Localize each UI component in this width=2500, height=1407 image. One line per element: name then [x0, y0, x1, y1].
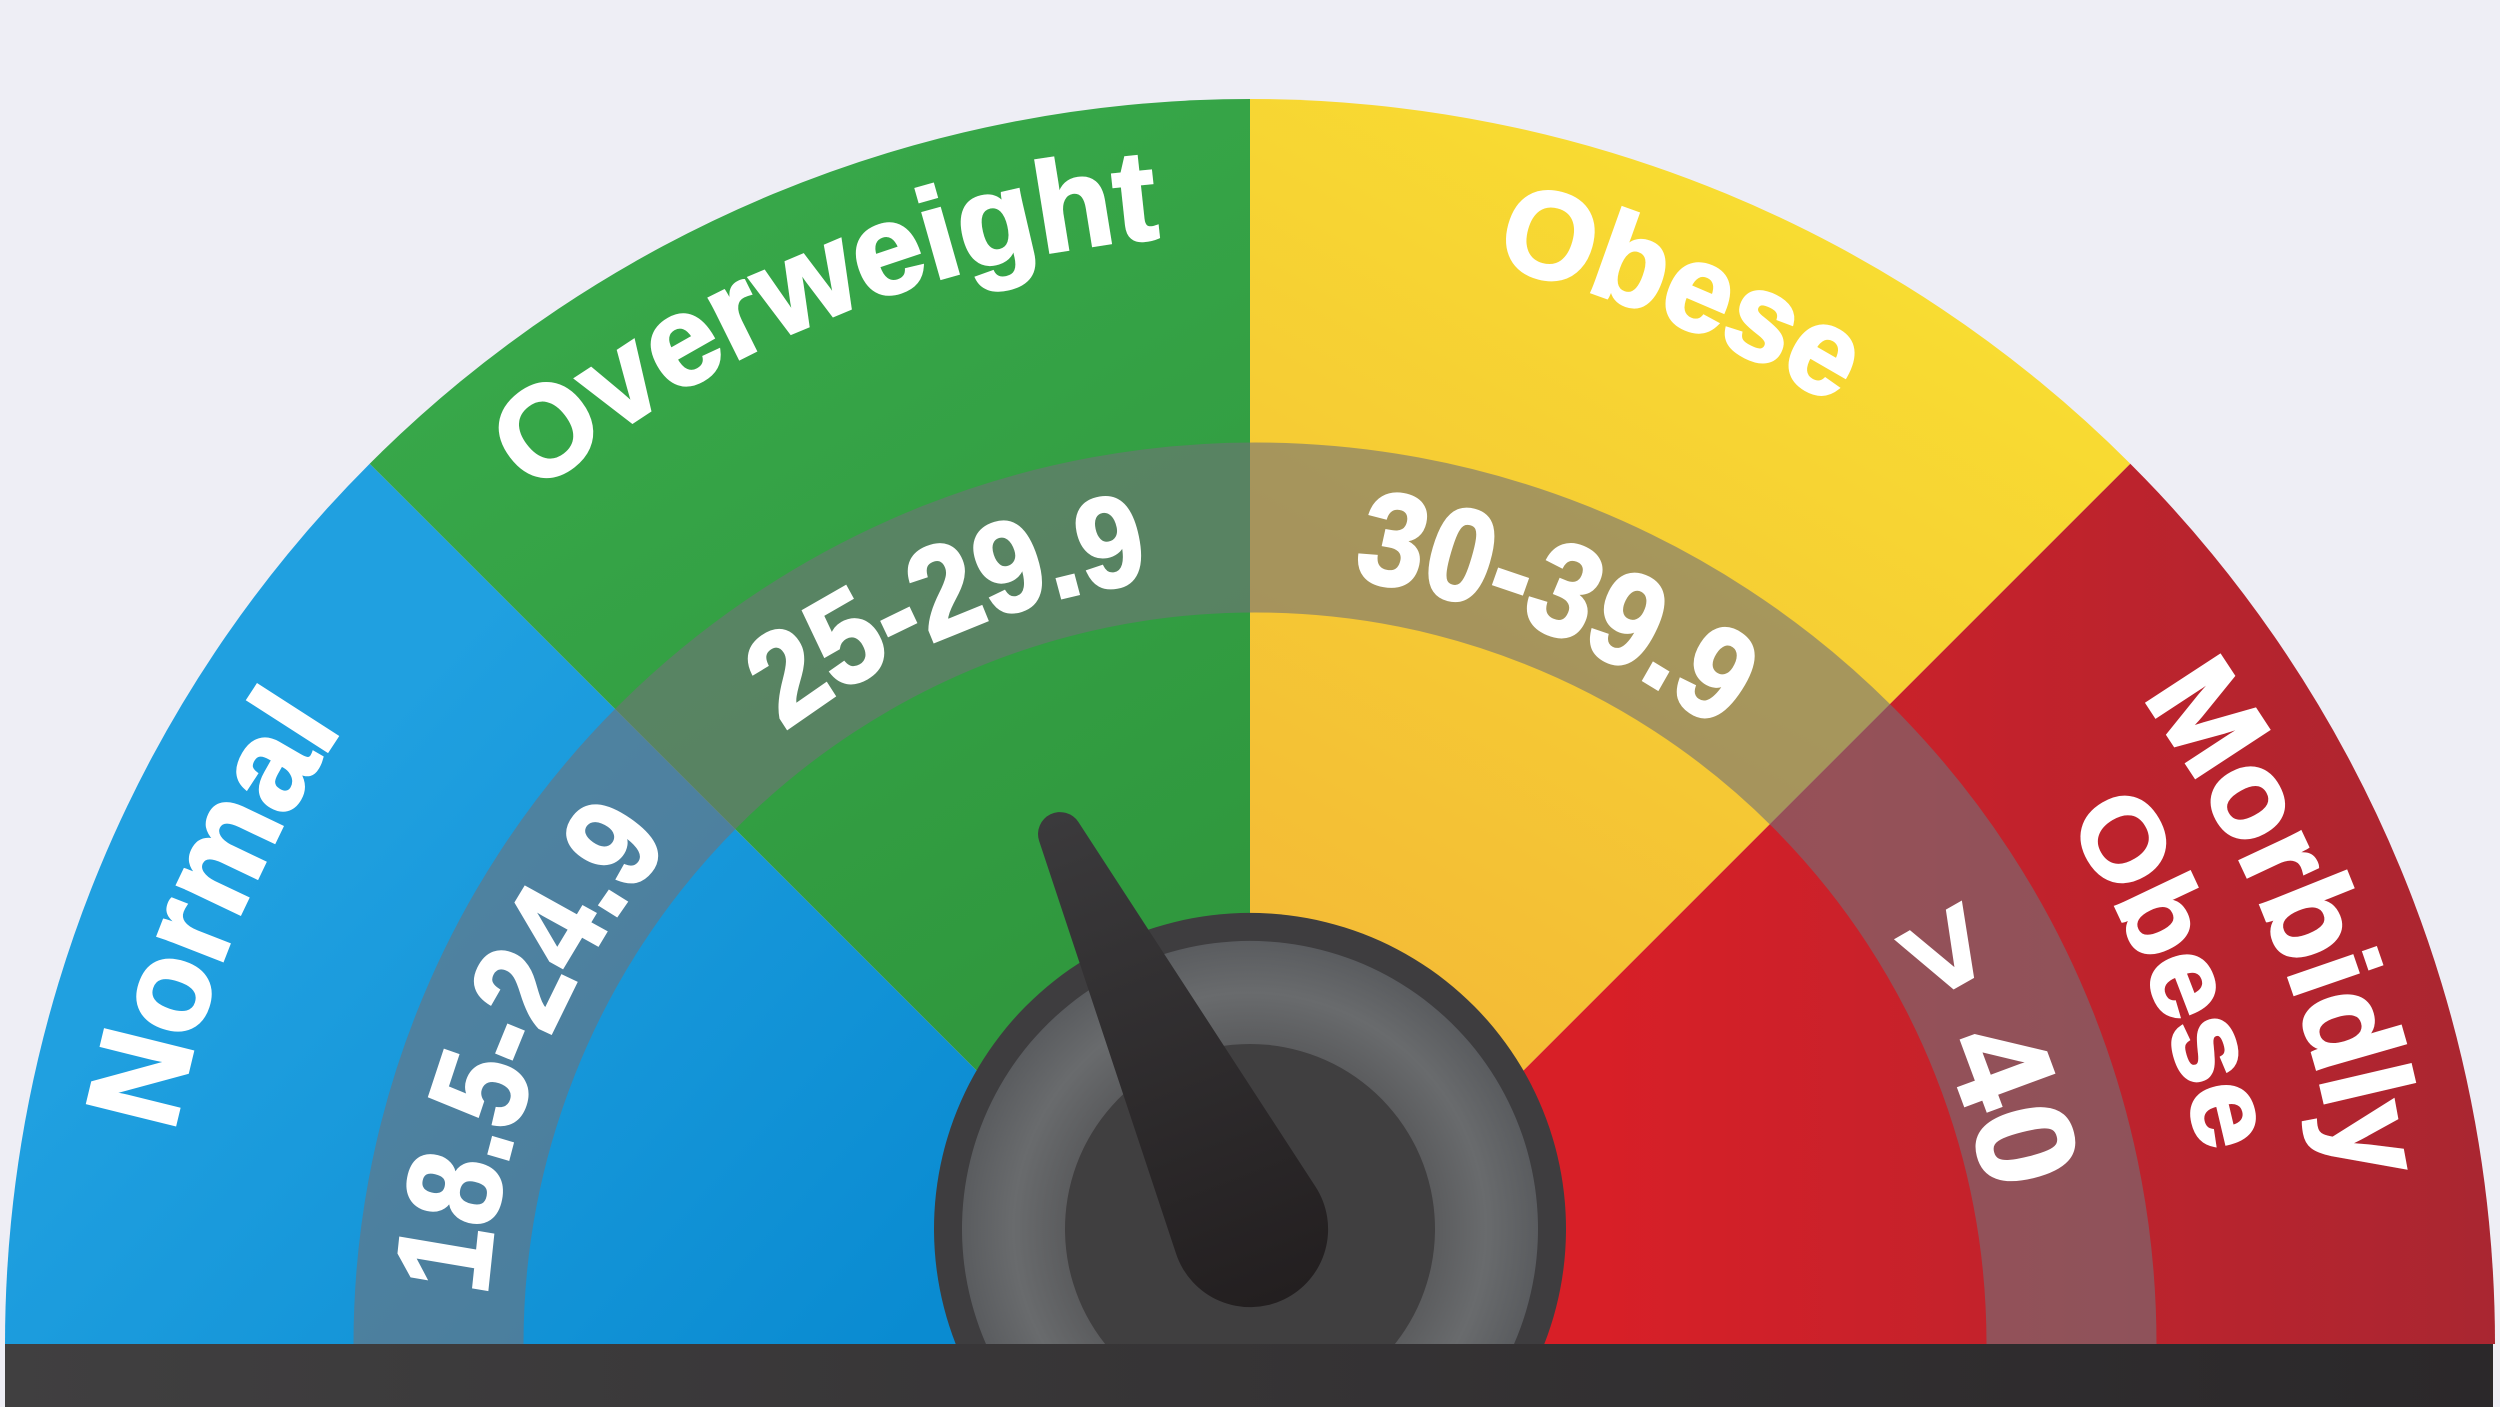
label: Normal: Normal	[86, 683, 340, 1126]
sector: overweight (green)	[370, 99, 1250, 1344]
range: 25-29.9: 25-29.9	[748, 496, 1142, 730]
sector: obese (yellow)	[1250, 99, 2130, 1344]
base bar	[5, 1344, 2493, 1407]
label: Morbidly Obese: Obese	[2080, 796, 2256, 1148]
label: Obese: Obese	[1506, 190, 1855, 396]
sector: normal (blue)	[5, 464, 1250, 1344]
range: 18.5-24.9: 18.5-24.9	[398, 804, 658, 1292]
sector: morbidly obese (red)	[1250, 464, 2495, 1344]
label: Overweight: Overweight	[498, 154, 1160, 478]
range: 30-39.9: 30-39.9	[1358, 492, 1755, 718]
label: Morbidly Obese: Morbidly	[2145, 653, 2416, 1170]
translucent BMI range ring	[438, 528, 2072, 1344]
range: > 40: > 40	[1894, 900, 2076, 1182]
gauge hub	[934, 913, 1566, 1344]
gauge needle	[1038, 812, 1328, 1307]
